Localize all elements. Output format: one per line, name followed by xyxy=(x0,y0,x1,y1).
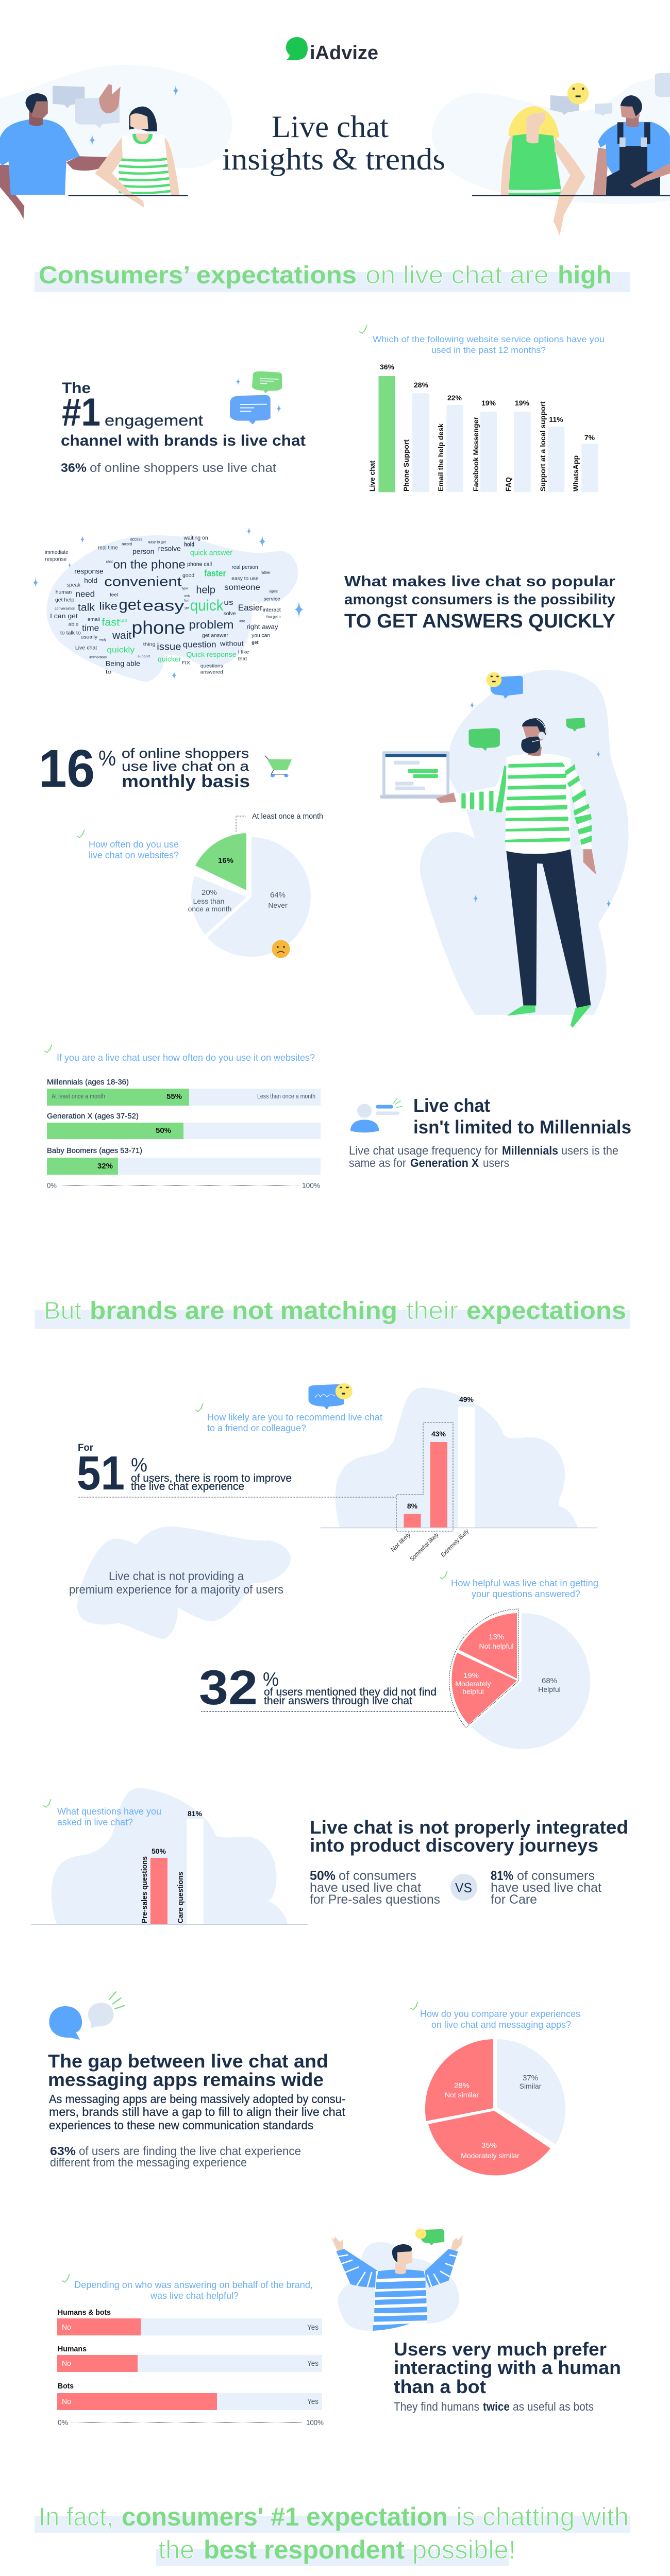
text block: live chat isn't limited to millennials: same as for xyxy=(349,1156,406,1170)
word cloud: why consumers like live chat: someone xyxy=(224,583,260,592)
word cloud: why consumers like live chat: time xyxy=(82,623,99,633)
icon: sparkles around agent xyxy=(470,701,611,908)
pie chart: how helpful: 13% xyxy=(489,1633,504,1641)
stacked bars: humans vs bots xyxy=(57,2308,324,2427)
word cloud: why consumers like live chat: able xyxy=(69,621,79,626)
stacked bars: humans vs bots: Yes xyxy=(307,2359,319,2368)
bar chart: website service options: Support at a local support xyxy=(539,401,547,492)
word cloud: why consumers like live chat: resolve xyxy=(158,545,181,552)
question: website service options: used in the past 12 months? xyxy=(431,345,546,355)
question: how helpful: your questions answered? xyxy=(472,1589,580,1599)
stacked bars: generations: 100% xyxy=(302,1181,320,1190)
question: depending on who was answering xyxy=(62,2275,313,2301)
pie chart: how often: once a month xyxy=(188,905,231,913)
word cloud: why consumers like live chat: that xyxy=(238,656,247,662)
stat: 32% did not find answers: their answers through live chat xyxy=(264,1695,412,1707)
stat: 51% room to improve xyxy=(77,1443,292,1500)
pie chart: comparing live chat and messaging: 28% xyxy=(454,2081,470,2090)
pie chart: how helpful: 19% xyxy=(463,1671,479,1680)
bar chart: likelihood to recommend: Extremely likely xyxy=(439,1527,471,1558)
text block: users prefer humans: They find humans xyxy=(394,2400,479,2413)
question: compare experiences xyxy=(411,2002,580,2030)
logo: iAdvize: iAdvize xyxy=(310,42,378,64)
word cloud: why consumers like live chat: FIX xyxy=(181,660,190,665)
word cloud: why consumers like live chat: to talk to xyxy=(60,630,81,636)
word cloud: why consumers like live chat: ask xyxy=(184,595,190,598)
word cloud: why consumers like live chat: phone call xyxy=(187,561,212,567)
bar chart: likelihood to recommend: Not likely xyxy=(389,1530,412,1553)
question: compare experiences: on live chat and messaging apps? xyxy=(431,2020,571,2030)
text block: gap between live chat and messaging apps: 63% xyxy=(50,2144,76,2158)
text block: users prefer humans: Users very much prefer xyxy=(394,2338,607,2360)
illustration: agent with headset and laptop xyxy=(380,670,628,1028)
question: compare experiences: How do you compare your experiences xyxy=(420,2009,580,2019)
stacked bars: humans vs bots: No xyxy=(62,2359,71,2368)
stacked bars: generations: Millennials (ages 18-36) xyxy=(47,1078,129,1087)
word cloud: why consumers like live chat: easy to get xyxy=(148,540,166,545)
pie chart: comparing live chat and messaging: 37% xyxy=(523,2074,538,2082)
word cloud: why consumers like live chat: call xyxy=(119,618,127,623)
word cloud: why consumers like live chat: get xyxy=(252,640,259,645)
text block: #1 engagement channel: The xyxy=(62,380,91,397)
word cloud: why consumers like live chat: solve xyxy=(224,611,236,617)
pie chart: how often: Less than xyxy=(193,897,224,905)
icon: sad emoji xyxy=(272,940,290,958)
pie chart: how helpful: Helpful xyxy=(538,1685,561,1693)
word cloud: why consumers like live chat: fast xyxy=(102,617,120,628)
pie chart: how helpful: 68% xyxy=(542,1676,557,1685)
word cloud: why consumers like live chat: without xyxy=(220,640,244,647)
icon: sparkles near bubbles xyxy=(236,378,281,413)
section heading: consumers' #1 expectation: In fact, xyxy=(39,2502,113,2531)
word cloud: why consumers like live chat: get xyxy=(119,596,141,613)
text block: not integrated into product discovery: have used live chat xyxy=(310,1880,421,1895)
word cloud: why consumers like live chat: phone xyxy=(131,618,186,638)
word cloud: why consumers like live chat: wait xyxy=(112,630,132,641)
section heading: consumers' #1 expectation: is chatting with xyxy=(456,2502,629,2531)
text block: live chat isn't limited to millennials: Live chat usage frequency for xyxy=(349,1144,498,1157)
text block: users prefer humans: twice xyxy=(483,2400,510,2413)
text block: live chat isn't limited to millennials: Live chat xyxy=(413,1095,490,1116)
section heading: consumers' #1 expectation xyxy=(35,2502,630,2566)
text block: gap between live chat and messaging apps: As messaging apps are being massively adopted by consu- xyxy=(49,2092,345,2106)
title xyxy=(222,110,445,176)
word cloud: why consumers like live chat: thing xyxy=(143,641,156,647)
word cloud: why consumers like live chat: issue xyxy=(157,641,181,652)
text block: #1 engagement channel: engagement xyxy=(105,412,204,429)
bar chart: likelihood to recommend: Somewhat likely xyxy=(408,1531,440,1563)
word cloud: why consumers like live chat: reply xyxy=(99,638,107,641)
section heading: brands are not matching: expectations xyxy=(466,1297,626,1325)
text block: what makes live chat popular: TO GET ANSWERS QUICKLY xyxy=(344,611,615,632)
question: what questions asked xyxy=(44,1800,161,1827)
question: how helpful xyxy=(440,1571,598,1599)
word cloud: why consumers like live chat: I can get xyxy=(50,613,78,620)
stacked bars: generations xyxy=(47,1078,321,1190)
section heading: consumers' #1 expectation: possible! xyxy=(412,2535,516,2564)
word cloud: why consumers like live chat: response xyxy=(74,567,104,575)
bar chart: website service options: FAQ xyxy=(504,477,512,492)
illustration: man and woman chatting xyxy=(0,65,232,219)
text block: live chat isn't limited to millennials: isn't limited to Millennials xyxy=(413,1116,631,1138)
word cloud: why consumers like live chat: rather xyxy=(261,570,271,575)
word cloud: why consumers like live chat: fun xyxy=(184,599,189,602)
word cloud: why consumers like live chat: human xyxy=(56,589,72,595)
word cloud: why consumers like live chat: agent xyxy=(269,589,278,594)
panel: not providing premium experience xyxy=(69,1527,291,1639)
word cloud: why consumers like live chat: Easier xyxy=(238,603,263,613)
text block: what makes live chat popular xyxy=(344,573,615,632)
word cloud: why consumers like live chat: help xyxy=(196,584,215,596)
word cloud: why consumers like live chat: feel xyxy=(110,592,118,597)
title: Live chat xyxy=(272,110,389,144)
text block: live chat isn't limited to millennials: Millennials xyxy=(502,1144,558,1157)
bar chart: website service options: 28% xyxy=(414,381,429,389)
stacked bars: humans vs bots: 100% xyxy=(306,2418,324,2427)
bar chart: website service options: 11% xyxy=(549,415,563,423)
question: how likely recommend: to a friend or colleague? xyxy=(207,1423,306,1433)
bar chart: questions asked in live chat: Pre-sales questions xyxy=(140,1856,149,1923)
stat: 51% room to improve: 51 xyxy=(77,1446,125,1500)
stat: 32% did not find answers xyxy=(199,1660,455,1715)
question: how often live chat: live chat on websites? xyxy=(89,850,179,860)
word cloud: why consumers like live chat: chat xyxy=(106,560,113,564)
stat: 32% did not find answers: % xyxy=(263,1669,279,1690)
stacked bars: generations: Baby Boomers (ages 53-71) xyxy=(47,1146,142,1155)
stat: 16% monthly: 16 xyxy=(39,739,95,798)
section heading: consumers' expectations: high xyxy=(558,262,612,289)
stat: 32% did not find answers: 32 xyxy=(199,1660,258,1715)
word cloud: why consumers like live chat: speak xyxy=(66,582,80,588)
word cloud: why consumers like live chat: get help xyxy=(55,597,74,603)
text block: #1 engagement channel: channel with brands is live chat xyxy=(61,432,306,449)
stat: 32% did not find answers: of users mentioned they did not find xyxy=(264,1686,437,1698)
pie chart: how helpful: Not helpful xyxy=(479,1642,513,1650)
stacked bars: generations: 55% xyxy=(166,1092,182,1101)
word cloud: why consumers like live chat: us xyxy=(224,598,233,606)
question: depending on who was answering: Depending on who was answering on behalf of the brand, xyxy=(74,2280,313,2290)
stat: 16% monthly xyxy=(39,739,250,798)
word cloud: why consumers like live chat: quick answer xyxy=(190,548,232,557)
section heading: consumers' #1 expectation: consumers' #1 expectation xyxy=(122,2502,448,2531)
word cloud: why consumers like live chat: You get a xyxy=(266,615,281,619)
word cloud: why consumers like live chat: response xyxy=(45,556,66,562)
word cloud: why consumers like live chat: immediate xyxy=(89,656,107,659)
panel: not providing premium experience: Live chat is not providing a xyxy=(109,1569,244,1583)
stacked bars: humans vs bots: Bots xyxy=(58,2382,74,2391)
word cloud: why consumers like live chat: question xyxy=(183,639,216,649)
word cloud: why consumers like live chat: easy xyxy=(143,597,185,615)
word cloud: why consumers like live chat: I like xyxy=(238,649,249,654)
word cloud: why consumers like live chat: good xyxy=(182,573,194,579)
bar chart: website service options: Live chat xyxy=(368,461,376,492)
logo: iAdvize xyxy=(286,37,378,64)
word cloud: why consumers like live chat: interact xyxy=(263,607,281,613)
word cloud: why consumers like live chat: convenient xyxy=(104,574,182,589)
stacked bars: generations: At least once a month xyxy=(52,1092,105,1100)
stat: 51% room to improve: % xyxy=(131,1454,147,1476)
stat: 16% monthly: % xyxy=(98,746,116,770)
word cloud: why consumers like live chat: hold xyxy=(184,541,194,548)
word cloud: why consumers like live chat: Quick response xyxy=(186,650,236,658)
stacked bars: generations: 0% xyxy=(47,1181,57,1190)
text block: users prefer humans: as useful as bots xyxy=(513,2400,594,2413)
word cloud: why consumers like live chat: quickly xyxy=(107,646,135,654)
bar chart: questions asked in live chat: 81% xyxy=(188,1809,203,1818)
text block: #1 engagement channel: 36% xyxy=(61,461,87,475)
word cloud: why consumers like live chat: real person xyxy=(231,565,258,570)
word cloud: why consumers like live chat: person xyxy=(132,547,154,555)
text block: not integrated into product discovery xyxy=(310,1817,628,1907)
word cloud: why consumers like live chat: record xyxy=(122,542,132,547)
word cloud: why consumers like live chat: info xyxy=(239,620,245,623)
icon: speech bubbles xyxy=(230,371,282,425)
stat: 51% room to improve: of users, there is room to improve xyxy=(131,1472,292,1484)
stat: 51% room to improve: the live chat experience xyxy=(131,1481,244,1493)
panel: not providing premium experience: premium experience for a majority of users xyxy=(69,1583,283,1596)
section heading: brands are not matching xyxy=(35,1297,630,1329)
stat: 16% monthly: monthly basis xyxy=(122,772,250,791)
bar chart: likelihood to recommend: 49% xyxy=(459,1395,474,1403)
text block: not integrated into product discovery: VS xyxy=(455,1880,472,1895)
text block: not integrated into product discovery: 81% xyxy=(491,1869,513,1883)
word cloud: why consumers like live chat: like xyxy=(99,600,118,612)
section heading: brands are not matching: But xyxy=(44,1297,81,1325)
text block: live chat isn't limited to millennials: users is the xyxy=(561,1144,618,1157)
word cloud: why consumers like live chat: real time xyxy=(98,545,118,551)
bar chart: likelihood to recommend: 8% xyxy=(407,1502,418,1510)
word cloud: why consumers like live chat: answered xyxy=(200,670,223,675)
text block: not integrated into product discovery: of consumers xyxy=(517,1869,595,1883)
bar chart: questions asked in live chat: 50% xyxy=(152,1847,166,1855)
word cloud: why consumers like live chat: quick xyxy=(190,597,224,614)
word cloud: why consumers like live chat: faster xyxy=(204,568,226,579)
word cloud: why consumers like live chat: go xyxy=(185,606,189,609)
pie chart: how helpful: helpful xyxy=(462,1687,484,1696)
word cloud: why consumers like live chat: Live chat xyxy=(75,645,97,651)
question: how often live chat users xyxy=(45,1045,315,1063)
text block: not integrated into product discovery: Live chat is not properly integrated xyxy=(310,1817,628,1838)
stacked bars: generations: Less than once a month xyxy=(257,1092,315,1100)
word cloud: why consumers like live chat: waiting on xyxy=(183,535,208,541)
icon: person with chat bars xyxy=(350,1098,403,1132)
word cloud: why consumers like live chat: need xyxy=(76,589,95,599)
word cloud: why consumers like live chat: get answer xyxy=(202,633,228,638)
pie chart: comparing live chat and messaging: Not similar xyxy=(445,2091,479,2099)
question: website service options: Which of the following website service options have you xyxy=(373,334,605,344)
text block: live chat isn't limited to millennials xyxy=(349,1095,631,1170)
bar chart: website service options: 7% xyxy=(584,433,595,442)
pie chart: how often: Never xyxy=(268,901,288,909)
stacked bars: humans vs bots: No xyxy=(62,2323,71,2332)
bar chart: website service options: 36% xyxy=(380,363,395,371)
icon: two chat bubbles xyxy=(49,1992,125,2040)
stacked bars: humans vs bots: 0% xyxy=(58,2418,68,2427)
section heading: consumers' expectations: on live chat are xyxy=(365,262,549,289)
stacked bars: humans vs bots: Humans & bots xyxy=(58,2308,111,2317)
word cloud: why consumers like live chat: to xyxy=(106,669,111,675)
text block: what makes live chat popular: What makes live chat so popular xyxy=(344,573,615,590)
icon: sparkles around word cloud xyxy=(33,527,304,680)
section heading: consumers' #1 expectation: best respondent xyxy=(204,2535,405,2564)
question: how likely recommend xyxy=(196,1404,382,1433)
question: depending on who was answering: was live chat helpful? xyxy=(150,2291,239,2301)
text block: live chat isn't limited to millennials: users xyxy=(483,1156,509,1170)
bar chart: website service options xyxy=(368,363,598,492)
section heading: consumers' expectations: Consumers’ expectations xyxy=(39,262,357,289)
pie chart: how often xyxy=(188,812,323,957)
text block: not integrated into product discovery: for Care xyxy=(491,1892,537,1907)
word cloud: why consumers like live chat: problem xyxy=(189,618,233,631)
word cloud: why consumers like live chat: you can xyxy=(252,633,270,638)
pie chart: how helpful: Moderately xyxy=(455,1680,491,1688)
word cloud: why consumers like live chat: on the phone xyxy=(113,558,186,571)
word cloud: why consumers like live chat: Being able xyxy=(106,659,140,667)
pie chart: how often: At least once a month xyxy=(252,812,323,821)
stacked bars: humans vs bots: Yes xyxy=(307,2397,319,2406)
bar chart: questions asked in live chat: Care questions xyxy=(176,1872,185,1923)
section heading: consumers' expectations xyxy=(35,262,630,292)
stacked bars: generations: Generation X (ages 37-52) xyxy=(47,1112,139,1121)
text block: #1 engagement channel: of online shoppers use live chat xyxy=(90,461,276,475)
pie chart: comparing live chat and messaging xyxy=(425,2039,565,2175)
bar chart: website service options: 22% xyxy=(447,394,462,402)
text block: gap between live chat and messaging apps: The gap between live chat and xyxy=(48,2050,328,2072)
stacked bars: humans vs bots: No xyxy=(62,2397,71,2406)
word cloud: why consumers like live chat: conversation xyxy=(55,606,75,611)
stacked bars: generations: 32% xyxy=(97,1162,113,1171)
text block: gap between live chat and messaging apps: different from the messaging experience xyxy=(50,2156,247,2169)
text block: #1 engagement channel xyxy=(61,380,306,475)
bar chart: website service options: WhatsApp xyxy=(572,455,580,492)
pie chart: comparing live chat and messaging: 35% xyxy=(481,2141,497,2150)
question: what questions asked: asked in live chat? xyxy=(57,1817,133,1827)
title: insights & trends xyxy=(222,142,445,176)
word cloud: why consumers like live chat: questions xyxy=(200,663,223,668)
text block: users prefer humans xyxy=(394,2338,621,2413)
question: what questions asked: What questions have you xyxy=(57,1806,161,1817)
question: how often live chat: How often do you use xyxy=(89,839,179,850)
bar chart: website service options: Phone Support xyxy=(402,439,410,492)
text block: gap between live chat and messaging apps xyxy=(48,2050,346,2169)
word cloud: why consumers like live chat: email xyxy=(88,617,100,622)
bar chart: website service options: 19% xyxy=(481,399,496,407)
text block: not integrated into product discovery: into product discovery journeys xyxy=(310,1835,598,1856)
question: how helpful: How helpful was live chat in getting xyxy=(451,1578,598,1588)
bar chart: likelihood to recommend xyxy=(78,1387,597,1563)
pie chart: comparing live chat and messaging: Similar xyxy=(520,2082,542,2090)
question: website service options xyxy=(360,326,605,355)
bar chart: website service options: Email the help desk xyxy=(437,423,445,492)
word cloud: why consumers like live chat: service xyxy=(263,596,280,601)
word cloud: why consumers like live chat: support xyxy=(138,655,150,658)
stat: 16% monthly: of online shoppers xyxy=(122,745,249,761)
word cloud: why consumers like live chat: access xyxy=(130,536,142,541)
stat: 51% room to improve: For xyxy=(78,1443,94,1453)
text block: not integrated into product discovery: of consumers xyxy=(339,1869,416,1883)
word cloud: why consumers like live chat: easy to use xyxy=(231,576,259,582)
bar chart: website service options: Facebook Messenger xyxy=(472,416,480,492)
icon: bubble with smiley xyxy=(309,1383,353,1410)
text block: #1 engagement channel: #1 xyxy=(62,391,100,434)
bar chart: likelihood to recommend: 43% xyxy=(431,1430,446,1438)
text block: gap between live chat and messaging apps: messaging apps remains wide xyxy=(48,2069,324,2090)
pie chart: how helpful xyxy=(449,1609,590,1749)
icon: sparkles left xyxy=(89,85,669,156)
stacked bars: humans vs bots: Yes xyxy=(307,2323,319,2332)
question: how often live chat xyxy=(77,830,179,860)
section heading: brands are not matching: their xyxy=(406,1297,458,1325)
icon: shopping cart xyxy=(265,756,292,777)
word cloud: why consumers like live chat: usually xyxy=(81,634,97,639)
text block: gap between live chat and messaging apps: mers, brands still have a gap to fill to align their live chat xyxy=(49,2105,346,2119)
text block: live chat isn't limited to millennials: Generation X xyxy=(410,1156,479,1170)
word cloud: why consumers like live chat: hold xyxy=(84,577,97,585)
text block: users prefer humans: interacting with a human xyxy=(394,2357,621,2378)
pie chart: how often: 20% xyxy=(202,888,217,897)
bar chart: questions asked in live chat xyxy=(31,1788,308,1925)
illustration: person raising arms xyxy=(331,2229,463,2331)
text block: not integrated into product discovery: have used live chat xyxy=(491,1880,601,1895)
text block: not integrated into product discovery: for Pre-sales questions xyxy=(310,1892,440,1907)
word cloud: why consumers like live chat: talk xyxy=(78,602,95,613)
word cloud: why consumers like live chat: type xyxy=(181,587,188,590)
stat: 16% monthly: use live chat on a xyxy=(122,758,249,774)
text block: gap between live chat and messaging apps: experiences to these new communication standards xyxy=(49,2119,313,2132)
stacked bars: humans vs bots: Humans xyxy=(58,2345,87,2353)
pie chart: how often: 16% xyxy=(218,856,233,865)
text block: gap between live chat and messaging apps: of users are finding the live chat experience xyxy=(79,2144,301,2158)
bar chart: website service options: 19% xyxy=(515,399,530,407)
section heading: brands are not matching: brands are not matching xyxy=(90,1297,397,1325)
word cloud: why consumers like live chat: right away xyxy=(246,623,278,631)
text block: what makes live chat popular: amongst consumers is the possibility xyxy=(344,591,615,608)
pie chart: comparing live chat and messaging: Moderately similar xyxy=(461,2151,520,2160)
pie chart: how often: 64% xyxy=(270,891,286,900)
word cloud: why consumers like live chat xyxy=(45,535,298,682)
word cloud: why consumers like live chat: immediate xyxy=(45,550,69,555)
word cloud: why consumers like live chat: quicker xyxy=(158,655,181,663)
text block: users prefer humans: than a bot xyxy=(394,2376,486,2397)
question: how often live chat users: If you are a live chat user how often do you use it on websites? xyxy=(57,1053,315,1063)
section heading: consumers' #1 expectation: the xyxy=(158,2535,194,2564)
question: how likely recommend: How likely are you to recommend live chat xyxy=(207,1412,382,1422)
stacked bars: generations: 50% xyxy=(156,1126,171,1135)
illustration: woman and man with overalls xyxy=(431,73,670,235)
text block: not integrated into product discovery: 50% xyxy=(310,1869,336,1883)
